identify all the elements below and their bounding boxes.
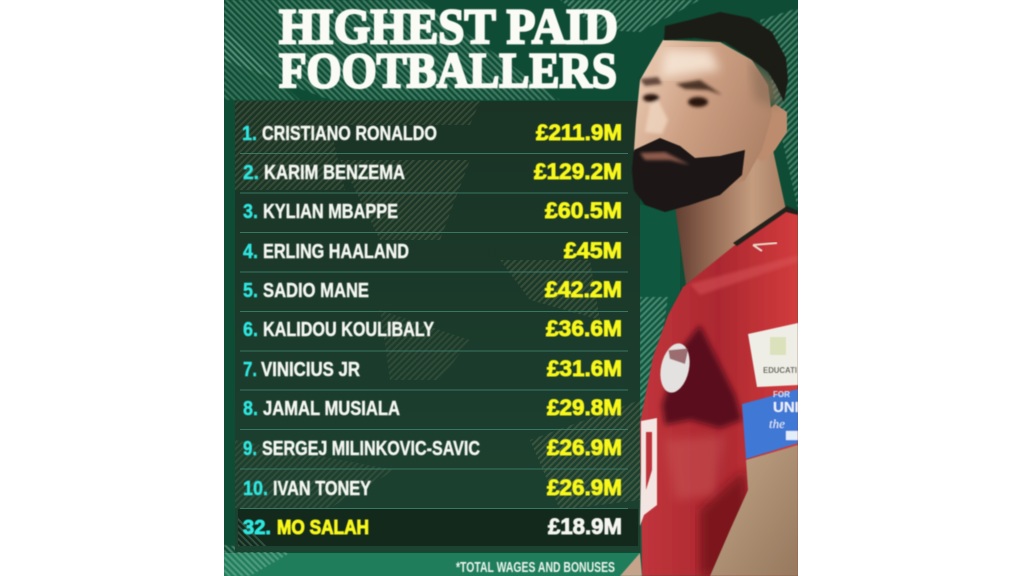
player photo: Mo Salah [620,12,799,576]
row 7: £31.6M [547,356,622,381]
row 2 [243,159,622,184]
row 6: 6. [243,319,258,341]
crest [656,341,694,395]
row 10 [243,475,622,500]
row 2: 2. [243,162,259,184]
row 3: KYLIAN MBAPPE [263,201,398,223]
sleeve patch [748,323,798,387]
row 32: Mo Salah highlight: £18.9M [548,514,622,539]
row 8 [243,395,622,420]
number on shirt [640,418,657,526]
row 2: KARIM BENZEMA [264,162,405,184]
captain armband: the [769,416,785,431]
beard [632,138,745,212]
row 6: KALIDOU KOULIBALY [263,319,435,341]
background: green poster [224,0,798,576]
row 1: CRISTIANO RONALDO [262,123,437,145]
captain armband: FOR [773,390,790,399]
row 4: ERLING HAALAND [263,241,409,263]
title [279,0,618,98]
row 9 [243,435,622,460]
sleeve patch: EDUCATI [763,366,797,375]
row 9: 9. [243,438,257,460]
neck [674,150,786,285]
row 32: Mo Salah highlight [243,514,622,539]
eyes and nose [640,77,722,134]
row 8: JAMAL MUSIALA [263,398,400,420]
row 6: £36.6M [546,316,622,341]
row 32: Mo Salah highlight: MO SALAH [277,517,369,539]
captain armband [742,389,799,459]
row 5: £42.2M [545,277,622,302]
mouth [640,152,690,165]
row 4: £45M [564,238,622,263]
row 8: 8. [243,398,258,420]
ranking list [242,120,622,539]
forehead highlight [660,50,720,78]
row 5 [243,277,622,302]
row 7: 7. [243,359,257,381]
row 3 [243,198,622,223]
row 4: 4. [243,241,258,263]
row 32: Mo Salah highlight: 32. [243,517,271,539]
row 1: 1. [242,123,257,145]
title: FOOTBALLERS [279,42,617,98]
row 1 [242,120,622,145]
row 10: 10. [243,478,268,500]
row 4 [243,238,622,263]
row dividers [240,154,628,508]
left arm sliver [620,553,642,576]
jersey [640,206,798,576]
row 10: IVAN TONEY [273,478,372,500]
row 5: SADIO MANE [263,280,369,302]
row 3: £60.5M [545,198,622,223]
row 1: £211.9M [536,120,622,145]
footnote: *TOTAL WAGES AND BONUSES [456,560,615,576]
row 6 [243,316,622,341]
row 8: £29.8M [547,395,622,420]
side shade near hair fade [750,58,782,108]
background: diagonal stripe shapes [224,0,798,576]
panel: ranking table background [235,101,640,552]
row 2: £129.2M [534,159,622,184]
captain armband: UNI [773,399,799,416]
row 7: VINICIUS JR [261,359,360,381]
row 3: 3. [243,201,258,223]
row 7 [243,356,622,381]
row 5: 5. [243,280,258,302]
face [634,40,772,200]
row 9: SERGEJ MILINKOVIC-SAVIC [262,438,480,460]
ear [750,104,787,162]
arm [710,445,798,576]
hair [664,12,788,102]
row 10: £26.9M [547,475,622,500]
row 9: £26.9M [547,435,622,460]
